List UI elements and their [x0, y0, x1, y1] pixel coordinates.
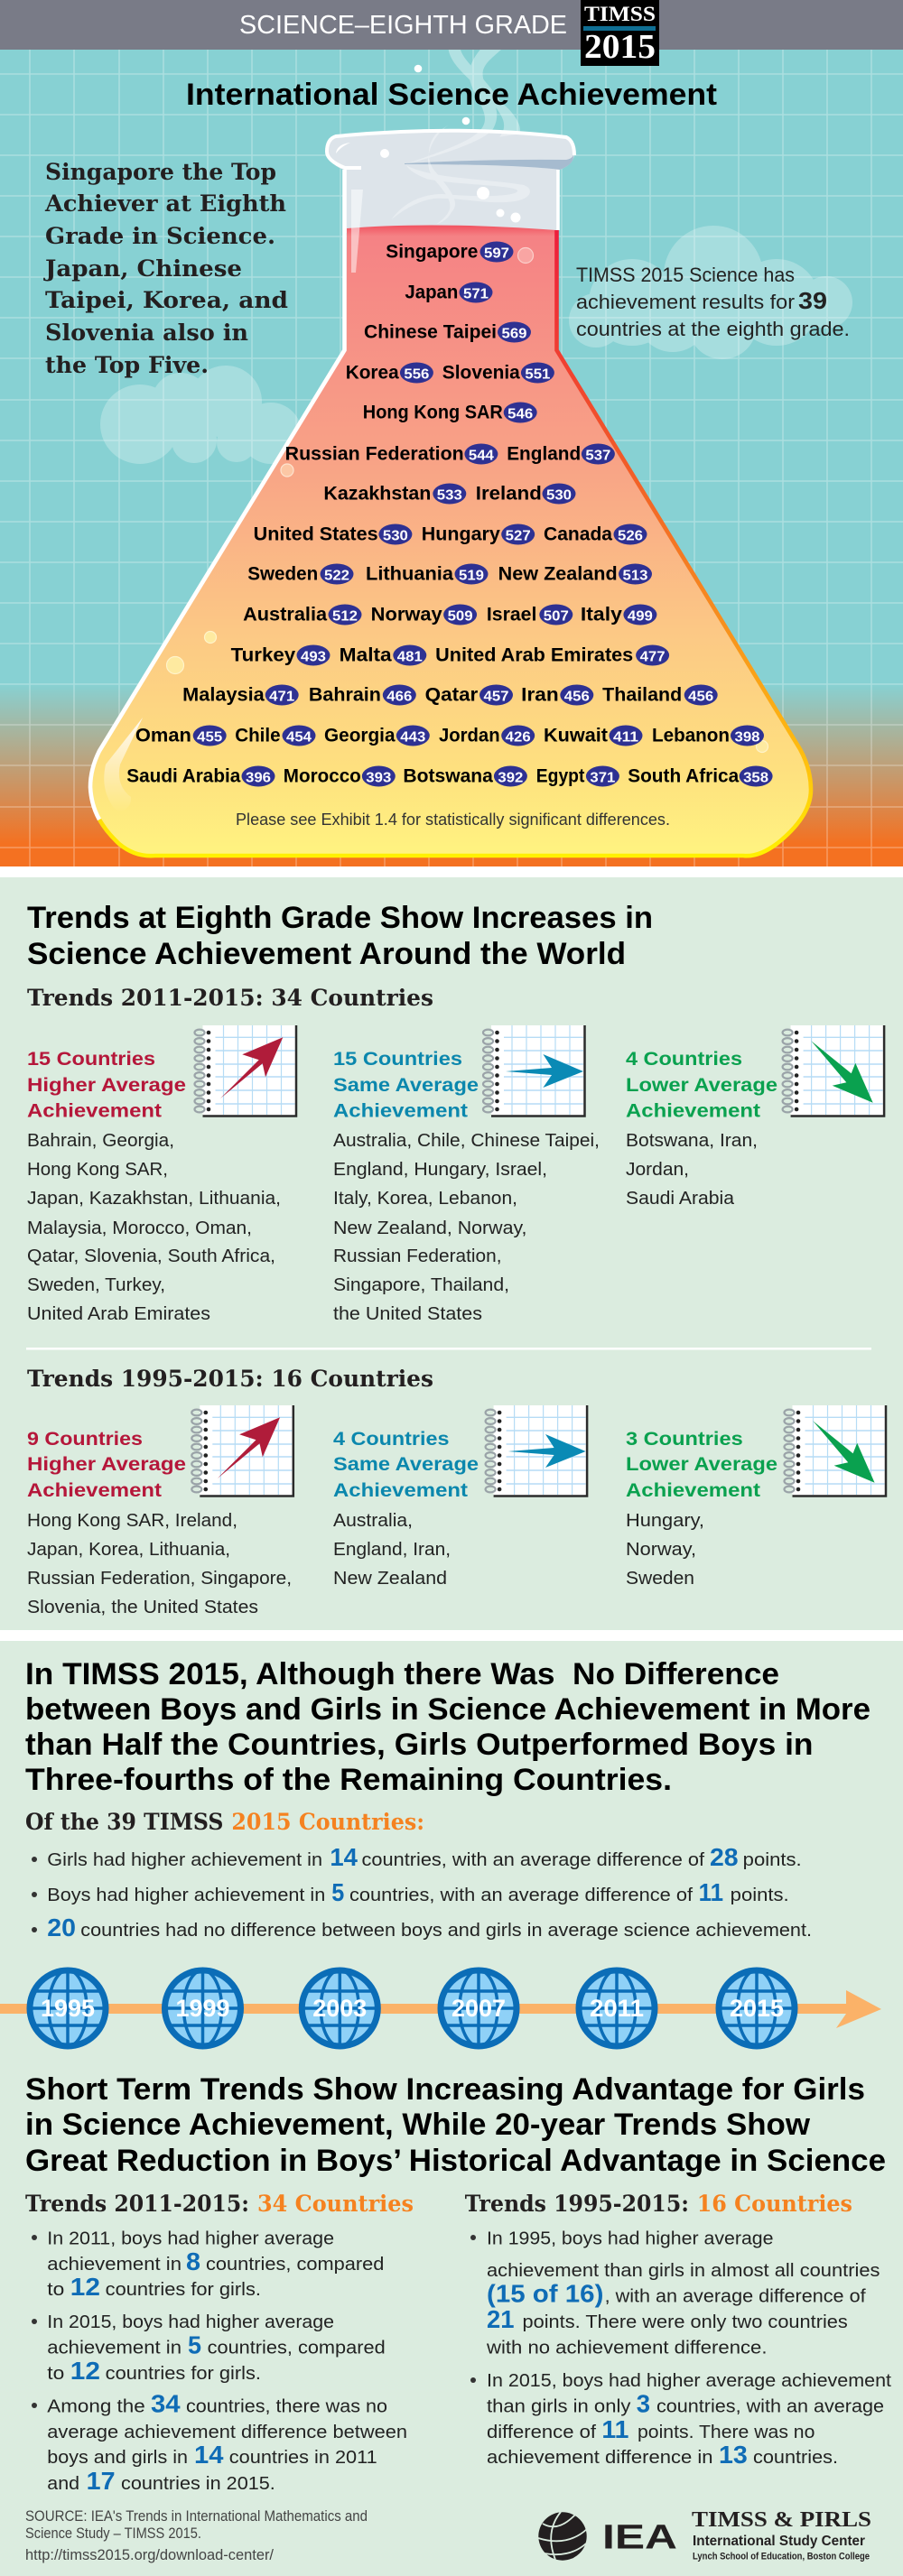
column: short-term bullets: achievement in [47, 2254, 182, 2275]
bullet: girls higher [32, 1843, 802, 1871]
row: Oman, Chile, Georgia, Jordan, Kuwait, Lebanon: Oman [135, 726, 191, 746]
column: lower 1995-2015: Achievement [626, 1479, 760, 1501]
column: lower 1995-2015: Hungary, [626, 1510, 704, 1531]
row: Turkey, Malta, United Arab Emirates: Turkey [231, 645, 296, 666]
row: Australia, Norway, Israel, Italy: 507 [544, 608, 569, 624]
icon: flask with liquid [90, 50, 811, 857]
bullet: girls higher: countries, with an average difference of [361, 1849, 704, 1870]
column: higher 2011-2015: Qatar, Slovenia, South Africa, [27, 1246, 275, 1266]
row: Malaysia, Bahrain, Qatar, Iran, Thailand: 457 [484, 689, 509, 704]
row: Malaysia, Bahrain, Qatar, Iran, Thailand: 456 [688, 689, 713, 704]
column: same 1995-2015 [333, 1428, 479, 1589]
column: short-term bullets: achievement in [47, 2338, 182, 2358]
column: same 2011-2015: Singapore, Thailand, [333, 1274, 509, 1295]
globe: 2011 [579, 1970, 655, 2046]
text block: top achievers: Singapore the Top [45, 159, 276, 186]
row: Oman, Chile, Georgia, Jordan, Kuwait, Lebanon [135, 726, 764, 746]
column: short-term bullets: In 2015, boys had higher average [47, 2312, 334, 2332]
heading: short term trends: in Science Achievement, While 20-year Trends Show [25, 2108, 811, 2142]
title: International Science Achievement [186, 78, 717, 112]
row: United States, Hungary, Canada: Hungary [422, 524, 500, 545]
TIMSS 2015 logo: 2015 [584, 28, 656, 66]
column: short-term bullets: countries, compared [206, 2254, 384, 2275]
neck highlight [351, 190, 363, 273]
row: Kazakhstan, Ireland: Ireland [476, 484, 542, 505]
column: higher 1995-2015: Higher Average [27, 1453, 186, 1475]
column: higher 2011-2015: 15 Countries [27, 1048, 155, 1070]
column: lower 2011-2015: 4 Countries [626, 1048, 742, 1070]
column: same 1995-2015: New Zealand [333, 1568, 447, 1589]
column: lower 2011-2015: Achievement [626, 1100, 760, 1122]
column: lower 1995-2015 [626, 1428, 777, 1589]
column: higher 1995-2015: Russian Federation, Singapore, [27, 1568, 292, 1589]
globe: 2011: 2011 [590, 1995, 644, 2022]
column: same 1995-2015: 4 Countries [333, 1428, 450, 1450]
column: same 2011-2015: Achievement [333, 1100, 468, 1122]
row: Malaysia, Bahrain, Qatar, Iran, Thailand [182, 684, 718, 706]
column: long-term bullets: difference of [487, 2422, 596, 2442]
bullet: no difference: 20 [47, 1913, 76, 1941]
column: higher 1995-2015 [27, 1428, 292, 1617]
logo: TIMSS & PIRLS: Lynch School of Education, Boston College [693, 2552, 870, 2562]
text block: top achievers [43, 159, 288, 379]
row: Oman, Chile, Georgia, Jordan, Kuwait, Lebanon: 426 [506, 729, 531, 745]
heading: trends: Science Achievement Around the World [27, 937, 626, 971]
row: Malaysia, Bahrain, Qatar, Iran, Thailand: Bahrain [309, 685, 381, 706]
globe: 1999: 1999 [175, 1995, 229, 2022]
row: Australia, Norway, Israel, Italy: 509 [448, 608, 473, 624]
row: Saudi Arabia, Morocco, Botswana, Egypt, South Africa: 393 [366, 770, 391, 785]
footnote: Please see Exhibit 1.4 for statistically significant differences. [236, 811, 670, 829]
row: Malaysia, Bahrain, Qatar, Iran, Thailand: Thailand [602, 685, 682, 706]
column: lower 2011-2015 [626, 1048, 777, 1209]
row: Korea, Slovenia: Slovenia [442, 363, 520, 384]
bullet: boys higher: Boys had higher achievement in [47, 1885, 325, 1905]
row: Oman, Chile, Georgia, Jordan, Kuwait, Lebanon: Jordan [439, 726, 500, 746]
text block: 39 countries [576, 264, 850, 340]
column: short-term bullets: and [47, 2473, 79, 2494]
row: Malaysia, Bahrain, Qatar, Iran, Thailand: 471 [269, 689, 294, 704]
row: Oman, Chile, Georgia, Jordan, Kuwait, Lebanon: 411 [613, 729, 638, 745]
column: higher 2011-2015: Achievement [27, 1100, 162, 1122]
bullet: girls higher: Girls had higher achievement in [47, 1849, 322, 1870]
row: Turkey, Malta, United Arab Emirates [231, 644, 669, 666]
row: United States, Hungary, Canada: Canada [544, 524, 612, 545]
text block: top achievers: Grade in Science. [45, 223, 275, 250]
column: lower 2011-2015: Lower Average [626, 1074, 777, 1096]
column: same 2011-2015 [333, 1048, 600, 1324]
column: long-term bullets: than girls in only [487, 2395, 631, 2417]
column: higher 2011-2015: Higher Average [27, 1074, 186, 1096]
bubbles in liquid [166, 247, 768, 753]
row: Malaysia, Bahrain, Qatar, Iran, Thailand: Iran [521, 685, 559, 706]
icon: notebook with up arrow [195, 1025, 296, 1116]
bullet: girls higher: 28 [710, 1843, 739, 1871]
column: same 1995-2015: England, Iran, [333, 1539, 451, 1560]
subheading: trends 2011-2015 gender: 34 Countries [257, 2191, 414, 2218]
source note: SOURCE: IEA's Trends in International Mathematics and [25, 2507, 368, 2525]
text block: top achievers: Taipei, Korea, and [45, 287, 288, 314]
globe: 2003: 2003 [312, 1995, 367, 2022]
row: Japan: Japan [405, 283, 458, 303]
row: Saudi Arabia, Morocco, Botswana, Egypt, South Africa: 392 [498, 770, 523, 785]
row: Saudi Arabia, Morocco, Botswana, Egypt, South Africa: 396 [246, 770, 271, 785]
logo: TIMSS & PIRLS: International Study Center [693, 2534, 865, 2549]
source note: Science Study – TIMSS 2015. [25, 2525, 201, 2542]
column: long-term bullets: 3 [637, 2390, 650, 2417]
row: Turkey, Malta, United Arab Emirates: Malta [340, 645, 392, 666]
row: Kazakhstan, Ireland [323, 484, 576, 505]
text block: top achievers: Japan, Chinese [43, 255, 242, 283]
column: long-term bullets: points. There were only two countries [522, 2312, 848, 2332]
bullet: boys higher: 5 [331, 1878, 344, 1906]
row: Sweden, Lithuania, New Zealand: 513 [623, 568, 648, 583]
row: Oman, Chile, Georgia, Jordan, Kuwait, Lebanon: Lebanon [652, 726, 730, 746]
row: Turkey, Malta, United Arab Emirates: 481 [397, 649, 423, 664]
row: Sweden, Lithuania, New Zealand: Lithuania [366, 564, 453, 585]
row: Hong Kong SAR: Hong Kong SAR [363, 403, 503, 423]
column: short-term bullets: to [47, 2279, 64, 2300]
row: Oman, Chile, Georgia, Jordan, Kuwait, Lebanon: 398 [735, 729, 760, 745]
globe: 1995: 1995 [41, 1995, 95, 2022]
flask white edge [90, 170, 345, 820]
heading: trends: Trends at Eighth Grade Show Increases in [27, 901, 653, 935]
column: higher 2011-2015: Malaysia, Morocco, Oman, [27, 1218, 252, 1238]
cloud: left [100, 366, 311, 464]
row: Malaysia, Bahrain, Qatar, Iran, Thailand: Malaysia [182, 685, 265, 706]
column: long-term bullets: achievement difference in [487, 2447, 713, 2468]
column: short-term bullets: countries in 2015. [121, 2473, 275, 2494]
text block: 39 countries: TIMSS 2015 Science has [576, 264, 795, 286]
column: short-term bullets: 34 [151, 2390, 181, 2417]
text block: top achievers: Slovenia also in [45, 320, 248, 347]
heading: short term trends [25, 2072, 886, 2178]
cloud: right [569, 226, 852, 359]
column: lower 2011-2015: Saudi Arabia [626, 1188, 735, 1209]
globe: 2003 [302, 1970, 377, 2046]
row: Russian Federation, England [285, 444, 615, 465]
column: lower 2011-2015: Botswana, Iran, [626, 1130, 758, 1151]
row: Turkey, Malta, United Arab Emirates: 477 [640, 649, 666, 664]
heading: short term trends: Short Term Trends Show Increasing Advantage for Girls [25, 2072, 865, 2107]
row: Korea, Slovenia: 551 [525, 366, 550, 382]
column: same 2011-2015: Russian Federation, [333, 1246, 502, 1266]
column: same 2011-2015: Australia, Chile, Chinese Taipei, [333, 1130, 600, 1151]
text block: top achievers: the Top Five. [45, 352, 209, 379]
flask neck glass [344, 168, 558, 233]
steam [391, 50, 530, 224]
globe: 1999 [164, 1970, 240, 2046]
flask coloured edge [99, 230, 811, 856]
column: higher 2011-2015 [27, 1048, 281, 1324]
column: long-term bullets: countries, with an average [656, 2395, 884, 2417]
globe: 2007 [441, 1970, 517, 2046]
text block: 39 countries: 39 [798, 287, 827, 314]
column: short-term bullets: countries for girls. [106, 2363, 261, 2384]
heading: trends [27, 901, 653, 971]
row: Russian Federation, England: England [507, 444, 581, 465]
heading: gender differences: Three-fourths of the Remaining Countries. [25, 1763, 672, 1797]
row: Australia, Norway, Israel, Italy: Australia [243, 605, 327, 625]
panel: gender differences [0, 1641, 903, 2576]
ranking: countries and scores [126, 242, 773, 787]
globe: 2015 [719, 1970, 795, 2046]
column: short-term bullets: 12 [70, 2357, 100, 2385]
globe: 2015: 2015 [730, 1995, 784, 2022]
column: long-term bullets [470, 2228, 891, 2469]
row: Malaysia, Bahrain, Qatar, Iran, Thailand: 466 [386, 689, 412, 704]
row: Sweden, Lithuania, New Zealand: Sweden [247, 564, 318, 585]
column: same 2011-2015: England, Hungary, Israel, [333, 1159, 547, 1180]
row: Saudi Arabia, Morocco, Botswana, Egypt, South Africa: Egypt [536, 766, 584, 787]
row: Japan [405, 282, 493, 303]
column: long-term bullets: 21 [487, 2305, 515, 2333]
rim outline [327, 131, 574, 168]
source note [25, 2507, 368, 2563]
row: Sweden, Lithuania, New Zealand: New Zealand [498, 564, 618, 585]
column: short-term bullets: In 2011, boys had higher average [47, 2228, 334, 2249]
row: Kazakhstan, Ireland: Kazakhstan [323, 484, 431, 505]
row: Oman, Chile, Georgia, Jordan, Kuwait, Lebanon: 455 [197, 729, 222, 745]
subheading: of the 39 countries: Of the 39 TIMSS [25, 1809, 223, 1836]
column: short-term bullets: countries, compared [208, 2338, 386, 2358]
column: short-term bullets: 17 [87, 2467, 116, 2495]
row: Australia, Norway, Israel, Italy: Italy [581, 605, 622, 625]
column: same 2011-2015: Same Average [333, 1074, 479, 1096]
column: short-term bullets: countries in 2011 [229, 2447, 377, 2468]
panel: trends [0, 877, 903, 1630]
subheading: of the 39 countries [25, 1809, 424, 1836]
column: same 1995-2015: Same Average [333, 1453, 479, 1475]
row: Saudi Arabia, Morocco, Botswana, Egypt, South Africa: Saudi Arabia [126, 766, 241, 787]
subheading: trends 1995-2015 gender [465, 2191, 852, 2218]
flask rim [327, 131, 574, 170]
TIMSS 2015 logo: TIMSS [584, 3, 656, 25]
column: short-term bullets: average achievement difference between [47, 2422, 407, 2442]
row: Australia, Norway, Israel, Italy: Israel [487, 605, 536, 625]
row: United States, Hungary, Canada [254, 524, 647, 545]
logo: TIMSS & PIRLS [692, 2508, 871, 2562]
header bar [0, 0, 903, 50]
column: long-term bullets: points. There was no [638, 2422, 815, 2442]
subheading: trends 2011-2015: Trends 2011-2015: 34 Countries [27, 985, 433, 1012]
subheading: of the 39 countries: 2015 Countries: [231, 1809, 424, 1836]
bullet: boys higher: points. [731, 1885, 789, 1905]
column: short-term bullets: 14 [194, 2441, 224, 2469]
bullet: boys higher [32, 1878, 789, 1906]
column: higher 2011-2015: United Arab Emirates [27, 1303, 210, 1324]
text block: 39 countries: achievement results for [576, 291, 795, 313]
column: short-term bullets: boys and girls in [47, 2447, 188, 2468]
row: Saudi Arabia, Morocco, Botswana, Egypt, South Africa: Morocco [284, 766, 361, 787]
row: Australia, Norway, Israel, Italy: Norway [371, 605, 442, 625]
row: Australia, Norway, Israel, Italy [243, 605, 656, 625]
text block: 39 countries: countries at the eighth grade. [576, 318, 850, 340]
bullet: girls higher: 14 [330, 1843, 358, 1871]
icon: IEA globe [538, 2512, 587, 2561]
row: Oman, Chile, Georgia, Jordan, Kuwait, Lebanon: 454 [286, 729, 312, 745]
heading: gender differences: than Half the Countries, Girls Outperformed Boys in [25, 1728, 813, 1762]
column: long-term bullets: with no achievement difference. [486, 2338, 768, 2358]
column: long-term bullets: 13 [719, 2441, 748, 2469]
column: long-term bullets: 11 [601, 2415, 628, 2443]
heading: gender differences [25, 1657, 870, 1797]
header bar: SCIENCE–EIGHTH GRADE [239, 11, 567, 40]
row: Korea, Slovenia: 556 [404, 366, 429, 382]
bullet: boys higher: 11 [699, 1878, 723, 1906]
row: Sweden, Lithuania, New Zealand [247, 563, 652, 585]
column: higher 2011-2015: Japan, Kazakhstan, Lithuania, [27, 1188, 281, 1209]
column: same 2011-2015: New Zealand, Norway, [333, 1218, 527, 1238]
row: Japan: 571 [463, 286, 489, 301]
icon: notebook with right arrow (1995) [486, 1405, 588, 1496]
row: Kazakhstan, Ireland: 530 [546, 487, 572, 503]
icon: notebook with down arrow [783, 1025, 885, 1116]
row: Oman, Chile, Georgia, Jordan, Kuwait, Lebanon: Chile [235, 726, 281, 746]
row: Russian Federation, England: 537 [585, 448, 610, 463]
bubbles [380, 65, 520, 222]
globe: 2007: 2007 [452, 1995, 506, 2022]
column: higher 2011-2015: Bahrain, Georgia, [27, 1130, 174, 1151]
row: Saudi Arabia, Morocco, Botswana, Egypt, South Africa: Botswana [403, 766, 493, 787]
row: Malaysia, Bahrain, Qatar, Iran, Thailand: Qatar [425, 685, 478, 706]
column: lower 1995-2015: 3 Countries [626, 1428, 743, 1450]
column: long-term bullets: (15 of 16) [487, 2280, 603, 2308]
row: Russian Federation, England: 544 [469, 448, 494, 463]
row: Sweden, Lithuania, New Zealand: 519 [459, 568, 484, 583]
row: Chinese Taipei: 569 [502, 326, 527, 341]
column: long-term bullets: achievement than girls in almost all countries [487, 2260, 880, 2281]
row: Hong Kong SAR: 546 [507, 406, 533, 422]
column: same 2011-2015: 15 Countries [333, 1048, 462, 1070]
row: United States, Hungary, Canada: United States [254, 524, 378, 545]
source note: http://timss2015.org/download-center/ [25, 2546, 274, 2563]
row: Sweden, Lithuania, New Zealand: 522 [324, 568, 349, 583]
column: short-term bullets: countries, there was no [186, 2395, 387, 2417]
row: Saudi Arabia, Morocco, Botswana, Egypt, South Africa: South Africa [628, 766, 740, 787]
column: higher 2011-2015: Sweden, Turkey, [27, 1274, 165, 1295]
globe: 1995 [30, 1970, 106, 2046]
row: Saudi Arabia, Morocco, Botswana, Egypt, South Africa [126, 765, 773, 787]
row: Korea, Slovenia [346, 363, 554, 384]
icon: notebook with right arrow [483, 1025, 585, 1116]
row: Russian Federation, England: Russian Federation [285, 444, 464, 465]
bullet: no difference [32, 1913, 812, 1941]
bulb highlight [104, 718, 143, 812]
row: Singapore: 597 [484, 246, 509, 261]
row: United States, Hungary, Canada: 526 [618, 528, 643, 543]
row: Korea, Slovenia: Korea [346, 363, 399, 384]
column: short-term bullets: countries for girls. [106, 2279, 261, 2300]
bullet: boys higher: countries, with an average difference of [349, 1885, 693, 1905]
column: same 2011-2015: the United States [333, 1303, 482, 1324]
row: Oman, Chile, Georgia, Jordan, Kuwait, Lebanon: Kuwait [544, 726, 608, 746]
column: lower 1995-2015: Lower Average [626, 1453, 777, 1475]
bullet: girls higher: points. [743, 1849, 802, 1870]
flask right neck edge [556, 170, 560, 230]
logo: IEA wordmark: IEA [602, 2518, 677, 2556]
subheading: trends 1995-2015: Trends 1995-2015: 16 Countries [27, 1366, 433, 1393]
row: Singapore: Singapore [386, 242, 478, 263]
column: higher 1995-2015: Achievement [27, 1479, 162, 1501]
column: lower 2011-2015: Jordan, [626, 1159, 689, 1180]
row: Australia, Norway, Israel, Italy: 499 [628, 608, 653, 624]
column: short-term bullets: 12 [70, 2273, 100, 2301]
timeline arrow [0, 1990, 881, 2028]
subheading: trends 1995-2015 gender: Trends 1995-2015: [465, 2191, 689, 2218]
column: higher 1995-2015: Hong Kong SAR, Ireland, [27, 1510, 237, 1531]
row: United States, Hungary, Canada: 527 [506, 528, 531, 543]
row: Oman, Chile, Georgia, Jordan, Kuwait, Lebanon: 443 [400, 729, 425, 745]
row: Turkey, Malta, United Arab Emirates: 493 [301, 649, 326, 664]
column: short-term bullets: 8 [186, 2247, 200, 2275]
column: same 2011-2015: Italy, Korea, Lebanon, [333, 1188, 517, 1209]
row: United States, Hungary, Canada: 530 [383, 528, 408, 543]
row: Turkey, Malta, United Arab Emirates: United Arab Emirates [435, 645, 633, 666]
column: same 1995-2015: Australia, [333, 1510, 413, 1531]
subheading: trends 2011-2015 gender [25, 2191, 414, 2218]
icon: notebook with up arrow (1995) [191, 1405, 293, 1496]
column: short-term bullets: to [47, 2363, 64, 2384]
row: Malaysia, Bahrain, Qatar, Iran, Thailand: 456 [564, 689, 590, 704]
column: short-term bullets: 5 [188, 2331, 201, 2359]
logo: TIMSS & PIRLS: TIMSS & PIRLS [692, 2508, 871, 2532]
column: lower 1995-2015: Sweden [626, 1568, 694, 1589]
column: lower 1995-2015: Norway, [626, 1539, 696, 1560]
subheading: trends 2011-2015 gender: Trends 2011-2015: [25, 2191, 249, 2218]
row: Oman, Chile, Georgia, Jordan, Kuwait, Lebanon: Georgia [324, 726, 396, 746]
rim shadow [405, 155, 573, 170]
panel: top flask section background [0, 50, 903, 866]
flask liquid [90, 225, 811, 857]
heading: short term trends: Great Reduction in Boys’ Historical Advantage in Science [25, 2144, 886, 2178]
column: same 1995-2015: Achievement [333, 1479, 468, 1501]
heading: gender differences: In TIMSS 2015, Although there Was No Difference [25, 1657, 779, 1691]
column: long-term bullets: In 1995, boys had higher average [487, 2228, 773, 2249]
icon: notebook with down arrow (1995) [784, 1405, 887, 1496]
text block: top achievers: Achiever at Eighth [44, 190, 286, 218]
bullet: no difference: countries had no difference between boys and girls in average science achievement. [80, 1920, 812, 1941]
row: Saudi Arabia, Morocco, Botswana, Egypt, South Africa: 371 [590, 770, 615, 785]
subheading: trends 1995-2015 gender: 16 Countries [697, 2191, 852, 2218]
rim highlight [336, 143, 350, 153]
row: Saudi Arabia, Morocco, Botswana, Egypt, South Africa: 358 [743, 770, 768, 785]
TIMSS 2015 logo [581, 0, 659, 66]
column: short-term bullets: Among the [47, 2395, 145, 2417]
column: long-term bullets: countries. [753, 2447, 838, 2468]
heading: gender differences: between Boys and Girls in Science Achievement in More [25, 1692, 870, 1727]
row: Australia, Norway, Israel, Italy: 512 [332, 608, 358, 624]
column: higher 2011-2015: Hong Kong SAR, [27, 1159, 168, 1180]
column: long-term bullets: In 2015, boys had higher average achievement [487, 2370, 891, 2391]
column: short-term bullets [32, 2228, 407, 2495]
row: Kazakhstan, Ireland: 533 [437, 487, 462, 503]
column: higher 1995-2015: Slovenia, the United States [27, 1597, 258, 1617]
column: long-term bullets: , with an average difference of [605, 2286, 866, 2307]
column: higher 1995-2015: 9 Countries [27, 1428, 143, 1450]
column: higher 1995-2015: Japan, Korea, Lithuania, [27, 1539, 230, 1560]
row: Chinese Taipei: Chinese Taipei [364, 322, 497, 343]
